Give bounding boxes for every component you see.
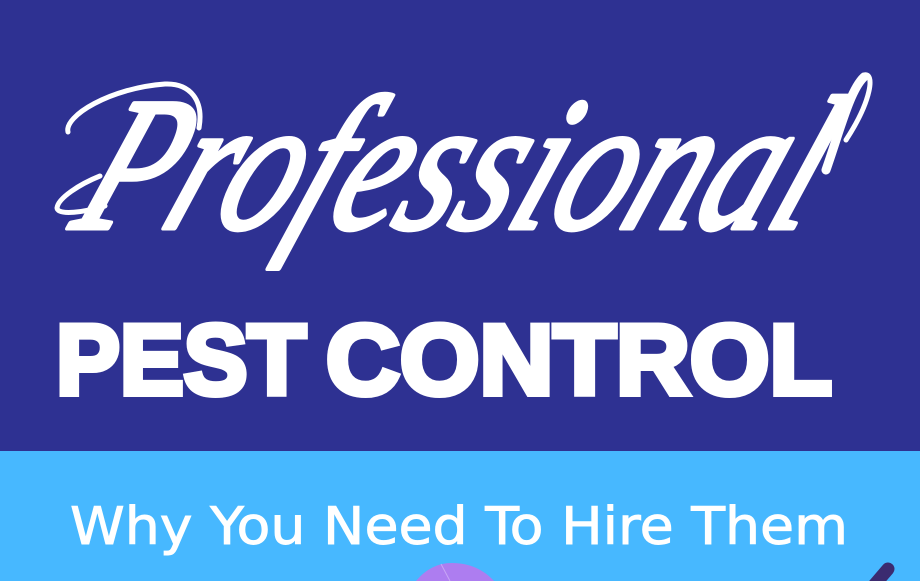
icon: dark handle top [870, 569, 888, 581]
heading: PEST CONTROL [56, 304, 832, 415]
panel: navy title background [0, 0, 920, 451]
heading: PEST CONTROL: PEST [56, 304, 306, 415]
decorative flourish on the title capital [57, 84, 200, 212]
icon: purple illustration top [416, 563, 494, 581]
heading: PEST CONTROL: CONTROL [326, 304, 832, 415]
decorative flourish on the title final letter [826, 75, 870, 170]
panel: sky blue subtitle band [0, 451, 920, 581]
subtitle: Why You Need To Hire Them: Why You Need To Hire Them [70, 497, 848, 557]
